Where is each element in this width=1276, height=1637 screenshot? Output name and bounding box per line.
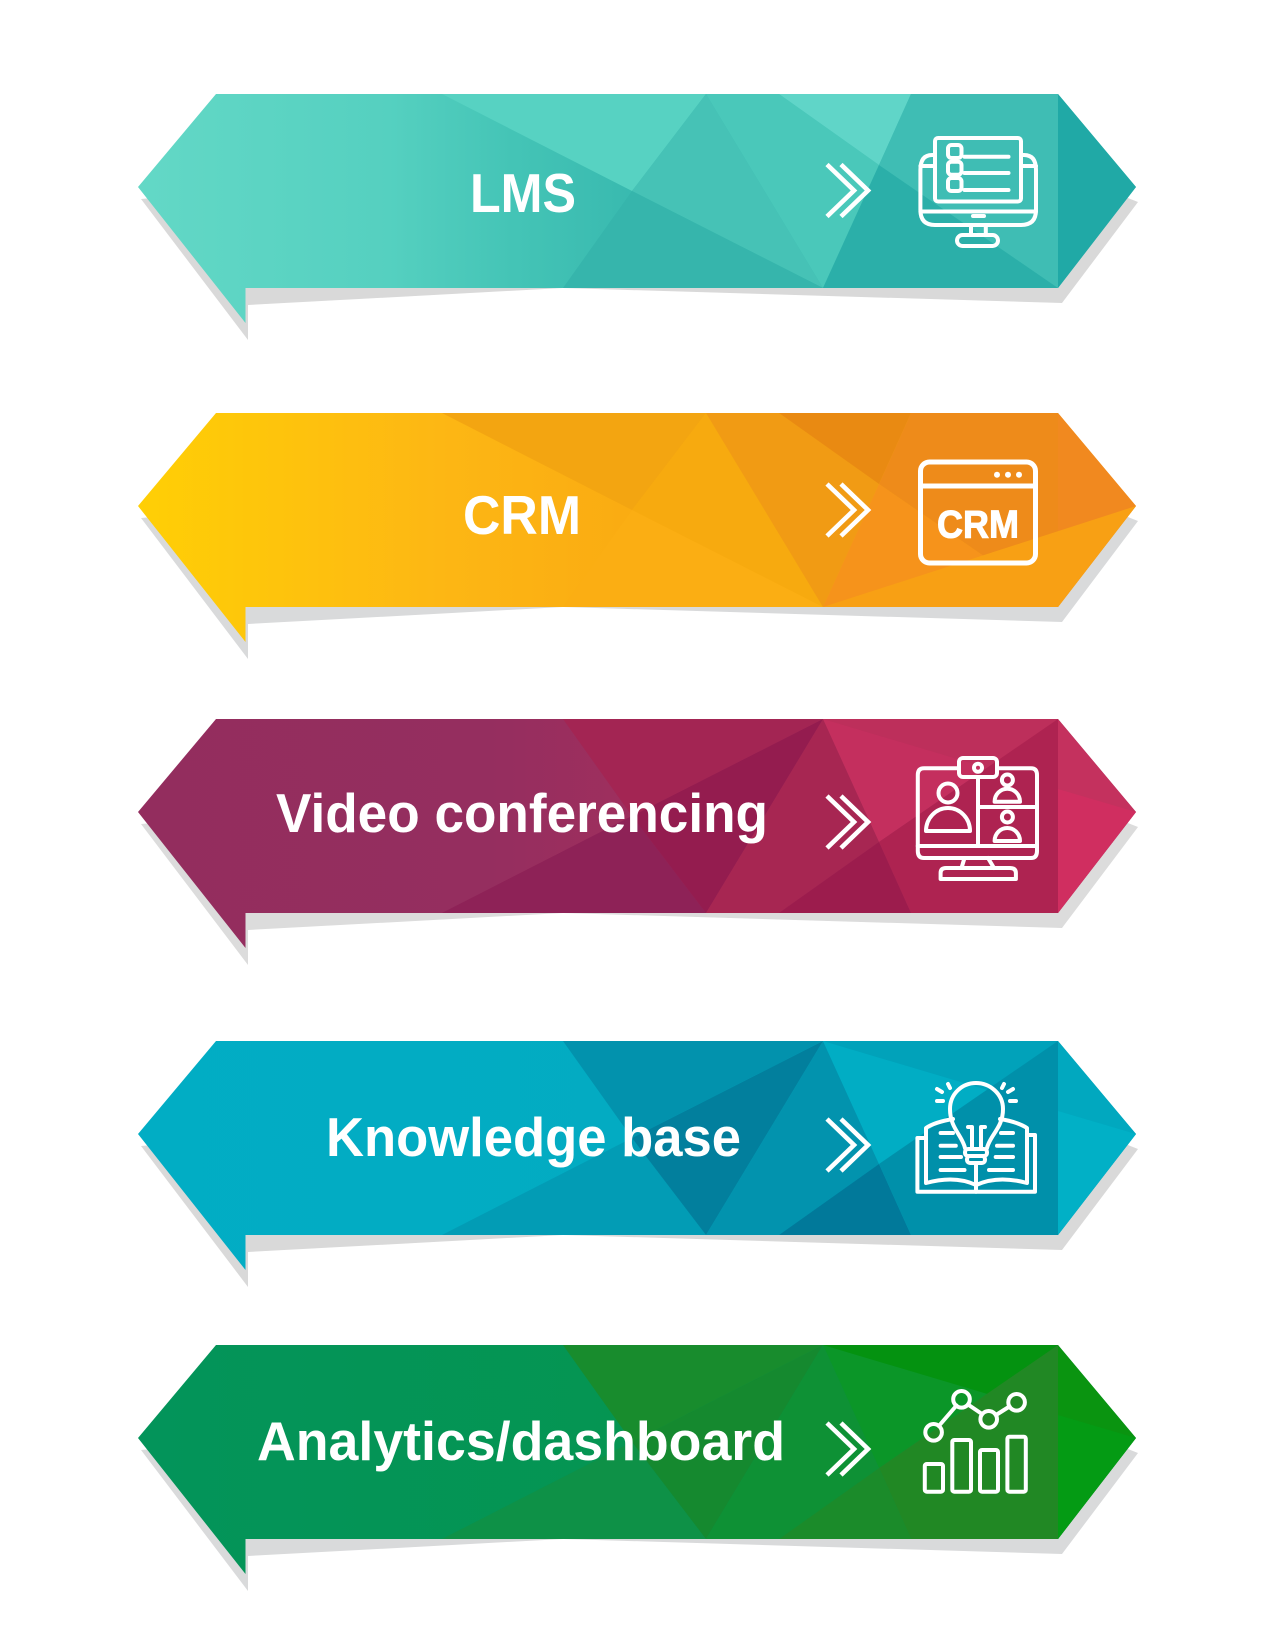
panel: Analytics/dashboard arrow: [138, 1345, 1138, 1591]
panel: CRM arrow: [138, 413, 1138, 659]
arrow body: [138, 413, 1136, 642]
label: Analytics/dashboard: Analytics/dashboard: [257, 1410, 785, 1472]
polygon facets: [442, 1345, 1136, 1539]
icon: browser window with CRM: CRM: [937, 504, 1019, 546]
label: Video conferencing: Video conferencing: [276, 782, 768, 844]
arrow body: [138, 94, 1136, 323]
label: CRM: CRM: [463, 484, 581, 546]
arrow shadow: [141, 1134, 1138, 1287]
chevron arrow: [827, 484, 868, 536]
chevron arrow: [827, 164, 868, 216]
polygon facets: [442, 94, 1136, 288]
label: Knowledge base: Knowledge base: [326, 1106, 741, 1168]
panel: Knowledge base arrow: [138, 1041, 1138, 1287]
icon: chart with line and bars: [925, 1391, 1026, 1492]
polygon facets: [442, 719, 1136, 913]
arrow shadow: [141, 506, 1138, 659]
arrow body: [138, 1345, 1136, 1574]
chevron arrow: [827, 1423, 868, 1475]
arrow body: [138, 719, 1136, 948]
icon: video call monitor: [918, 758, 1037, 879]
icon: browser window with CRM: [920, 462, 1036, 563]
polygon facets: [442, 413, 1136, 607]
arrow shadow: [141, 812, 1138, 965]
polygon facets: [442, 1041, 1136, 1235]
arrow shadow: [141, 1438, 1138, 1591]
icon: monitor with checklist: [920, 138, 1036, 246]
icon: book with light bulb: [917, 1083, 1035, 1192]
arrow body: [138, 1041, 1136, 1270]
arrow shadow: [141, 187, 1138, 340]
panel: LMS arrow: [138, 94, 1138, 340]
chevron arrow: [827, 1119, 868, 1171]
panel: Video conferencing arrow: [138, 719, 1138, 965]
chevron arrow: [827, 796, 868, 848]
label: LMS: LMS: [470, 162, 576, 224]
